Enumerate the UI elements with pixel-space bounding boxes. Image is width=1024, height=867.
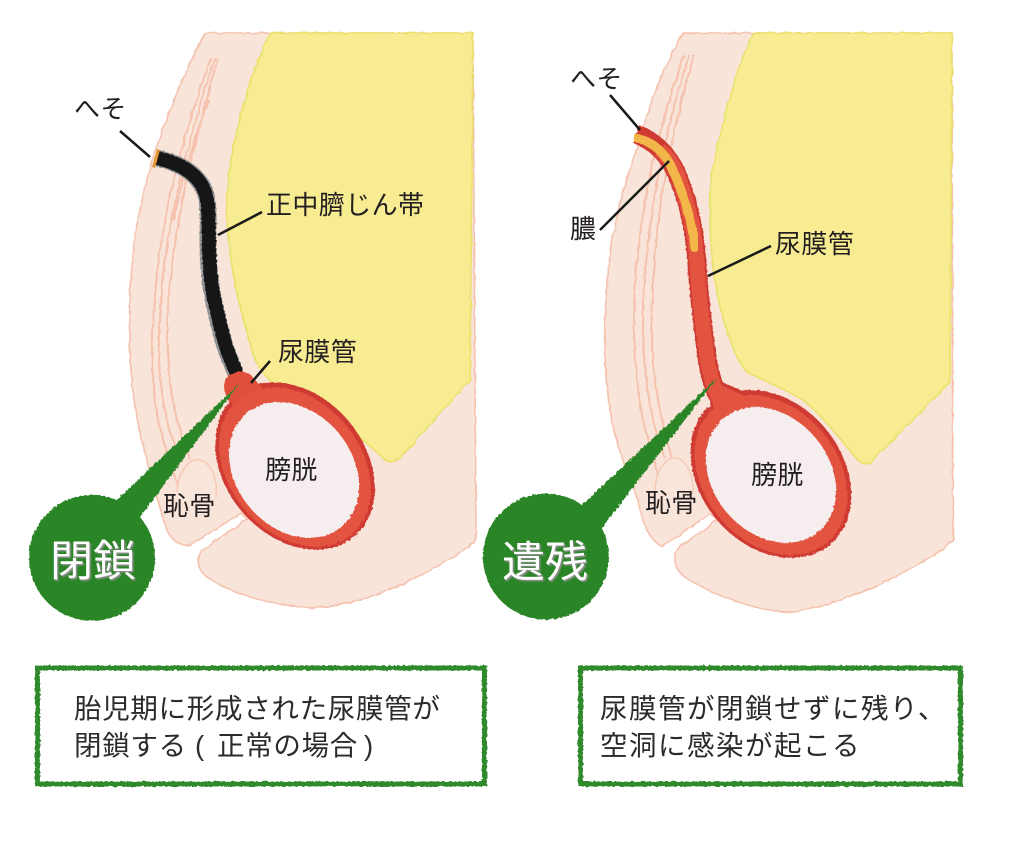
abdominal muscle lines [634, 55, 694, 480]
label: urachus [708, 229, 854, 276]
abdominal muscle lines [152, 58, 218, 490]
callout: closure [29, 383, 240, 621]
text box: persistence description: 尿膜管が閉鎖せずに残り、 [600, 693, 947, 724]
label: bladder: 膀胱 [751, 460, 804, 490]
pubic bone [655, 458, 693, 495]
label: bladder: 膀胱 [265, 455, 318, 485]
label: navel: へそ [74, 94, 127, 124]
text box: closure description: ( [195, 730, 205, 761]
label: pubic bone: 恥骨 [645, 488, 698, 518]
body tissue [129, 33, 476, 607]
text box: closure description: 閉鎖する [74, 730, 187, 761]
pubic bone [177, 460, 216, 498]
text box: persistence description [580, 668, 960, 784]
fat region [710, 33, 952, 463]
label: navel [570, 64, 640, 130]
body tissue [605, 33, 953, 612]
callout: persistence: 遺残 [502, 539, 588, 587]
label: pubic bone: 恥骨 [163, 491, 216, 521]
label: median umbilical ligament [218, 190, 424, 235]
label: median umbilical ligament: 正中臍じん帯 [266, 190, 424, 220]
label: pus [570, 161, 669, 244]
label: navel: へそ [570, 64, 623, 94]
label: urachus [251, 337, 357, 383]
fat region [227, 33, 473, 462]
pus inside the tube [637, 138, 695, 248]
callout: persistence [483, 378, 717, 620]
label: urachus: 尿膜管 [775, 229, 854, 259]
text box: closure description: 正常の場合 [217, 730, 358, 761]
callout: closure: 閉鎖 [50, 538, 136, 586]
panel: persistent urachus diagram [483, 33, 953, 620]
text box: closure description: ) [364, 730, 374, 761]
text box: closure description: 胎児期に形成された尿膜管が [74, 693, 441, 724]
label: navel [74, 94, 150, 157]
text box: closure description [38, 668, 484, 784]
label: urachus: 尿膜管 [278, 337, 357, 367]
bladder [182, 351, 408, 581]
text box: persistence description: 空洞に感染が起こる [600, 730, 861, 761]
urachus tube and bladder [636, 134, 885, 590]
closed ligament band [157, 158, 238, 375]
navel tip [152, 149, 160, 168]
label: pus: 膿 [570, 214, 596, 244]
panel: closed urachus diagram [29, 33, 476, 621]
